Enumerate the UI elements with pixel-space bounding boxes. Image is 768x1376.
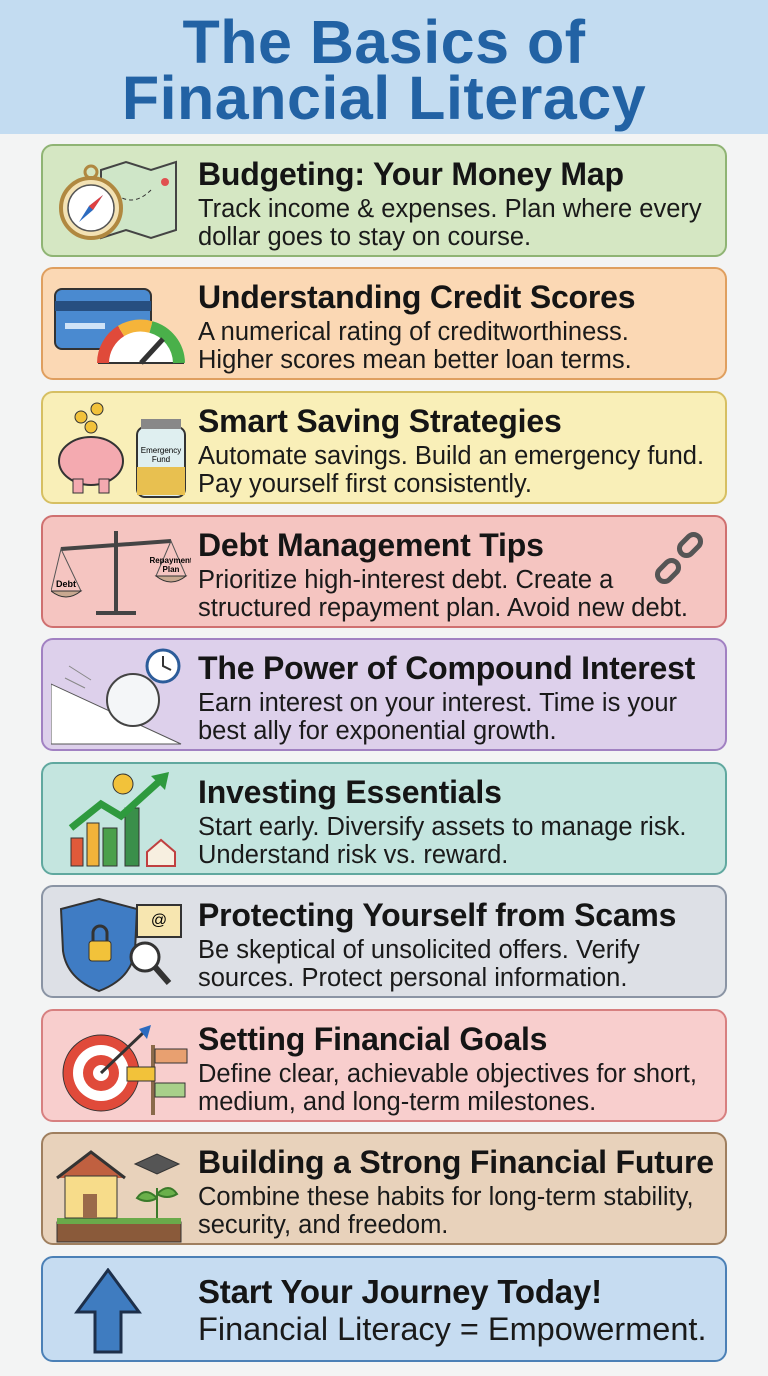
- panel: budgeting: [41, 144, 727, 257]
- heading: Investing Essentials: [198, 774, 502, 810]
- title: Financial Literacy: [122, 64, 646, 132]
- text: sources. Protect personal information.: [198, 964, 627, 992]
- text: Be skeptical of unsolicited offers. Verify: [198, 936, 640, 964]
- text: [198, 1060, 697, 1116]
- title: The Basics of: [182, 8, 586, 76]
- panel: compound interest: [41, 638, 727, 751]
- heading: Protecting Yourself from Scams: [198, 897, 676, 933]
- icon: house, plant and grad cap: [56, 1150, 182, 1242]
- title band: [0, 0, 768, 134]
- heading: Understanding Credit Scores: [198, 279, 635, 315]
- text: Define clear, achievable objectives for short,: [198, 1060, 697, 1088]
- text: best ally for exponential growth.: [198, 717, 557, 745]
- text: [198, 566, 688, 622]
- heading: Setting Financial Goals: [198, 1021, 547, 1057]
- panel: debt: [41, 515, 727, 628]
- icon: piggy bank and jar: Emergency: [141, 446, 181, 455]
- panel: saving: [41, 391, 727, 504]
- panel: scams: [41, 885, 727, 998]
- text: Prioritize high-interest debt. Create a: [198, 566, 613, 594]
- icon: compass and map: [59, 160, 177, 240]
- icon: broken chain: [655, 532, 703, 584]
- text: Pay yourself first consistently.: [198, 470, 532, 498]
- panel: goals: [41, 1009, 727, 1122]
- heading: The Power of Compound Interest: [198, 650, 695, 686]
- text: [198, 195, 702, 251]
- heading: Building a Strong Financial Future: [198, 1144, 714, 1180]
- panel: call to action: [41, 1256, 727, 1362]
- panel: future: [41, 1132, 727, 1245]
- text: Financial Literacy = Empowerment.: [198, 1311, 706, 1347]
- heading: Smart Saving Strategies: [198, 403, 562, 439]
- text: Higher scores mean better loan terms.: [198, 346, 632, 374]
- title: [122, 8, 646, 132]
- icon: growth chart: [68, 772, 176, 867]
- icon: scale: [51, 531, 191, 615]
- icon: piggy bank and jar: [58, 402, 186, 498]
- icon: scale: Debt: [56, 579, 76, 589]
- text: Start early. Diversify assets to manage risk.: [198, 813, 686, 841]
- text: medium, and long-term milestones.: [198, 1088, 596, 1116]
- icon: piggy bank and jar: Fund: [152, 455, 170, 464]
- text: dollar goes to stay on course.: [198, 223, 531, 251]
- text: [198, 813, 686, 869]
- text: [198, 936, 640, 992]
- icon: snowball and clock: [51, 648, 182, 744]
- icon: credit card and gauge: [54, 288, 185, 365]
- heading: Debt Management Tips: [198, 527, 544, 563]
- icon: scale: Plan: [163, 565, 180, 574]
- text: Combine these habits for long-term stability,: [198, 1183, 694, 1211]
- text: [198, 1183, 694, 1239]
- text: [198, 442, 704, 498]
- icon: target and signpost: [62, 1025, 188, 1115]
- text: [198, 689, 677, 745]
- text: Earn interest on your interest. Time is your: [198, 689, 677, 717]
- heading: Budgeting: Your Money Map: [198, 156, 624, 192]
- icon: shield, envelope, magnifier: @: [151, 912, 167, 929]
- heading: Start Your Journey Today!: [198, 1273, 602, 1310]
- text: Understand risk vs. reward.: [198, 841, 508, 869]
- text: security, and freedom.: [198, 1211, 448, 1239]
- text: [198, 318, 632, 374]
- text: Track income & expenses. Plan where every: [198, 195, 702, 223]
- panel: credit scores: [41, 267, 727, 380]
- text: structured repayment plan. Avoid new debt.: [198, 594, 688, 622]
- text: Automate savings. Build an emergency fund.: [198, 442, 704, 470]
- panel: investing: [41, 762, 727, 875]
- icon: up arrow: [74, 1268, 142, 1354]
- text: A numerical rating of creditworthiness.: [198, 318, 629, 346]
- icon: shield, envelope, magnifier: [60, 898, 182, 992]
